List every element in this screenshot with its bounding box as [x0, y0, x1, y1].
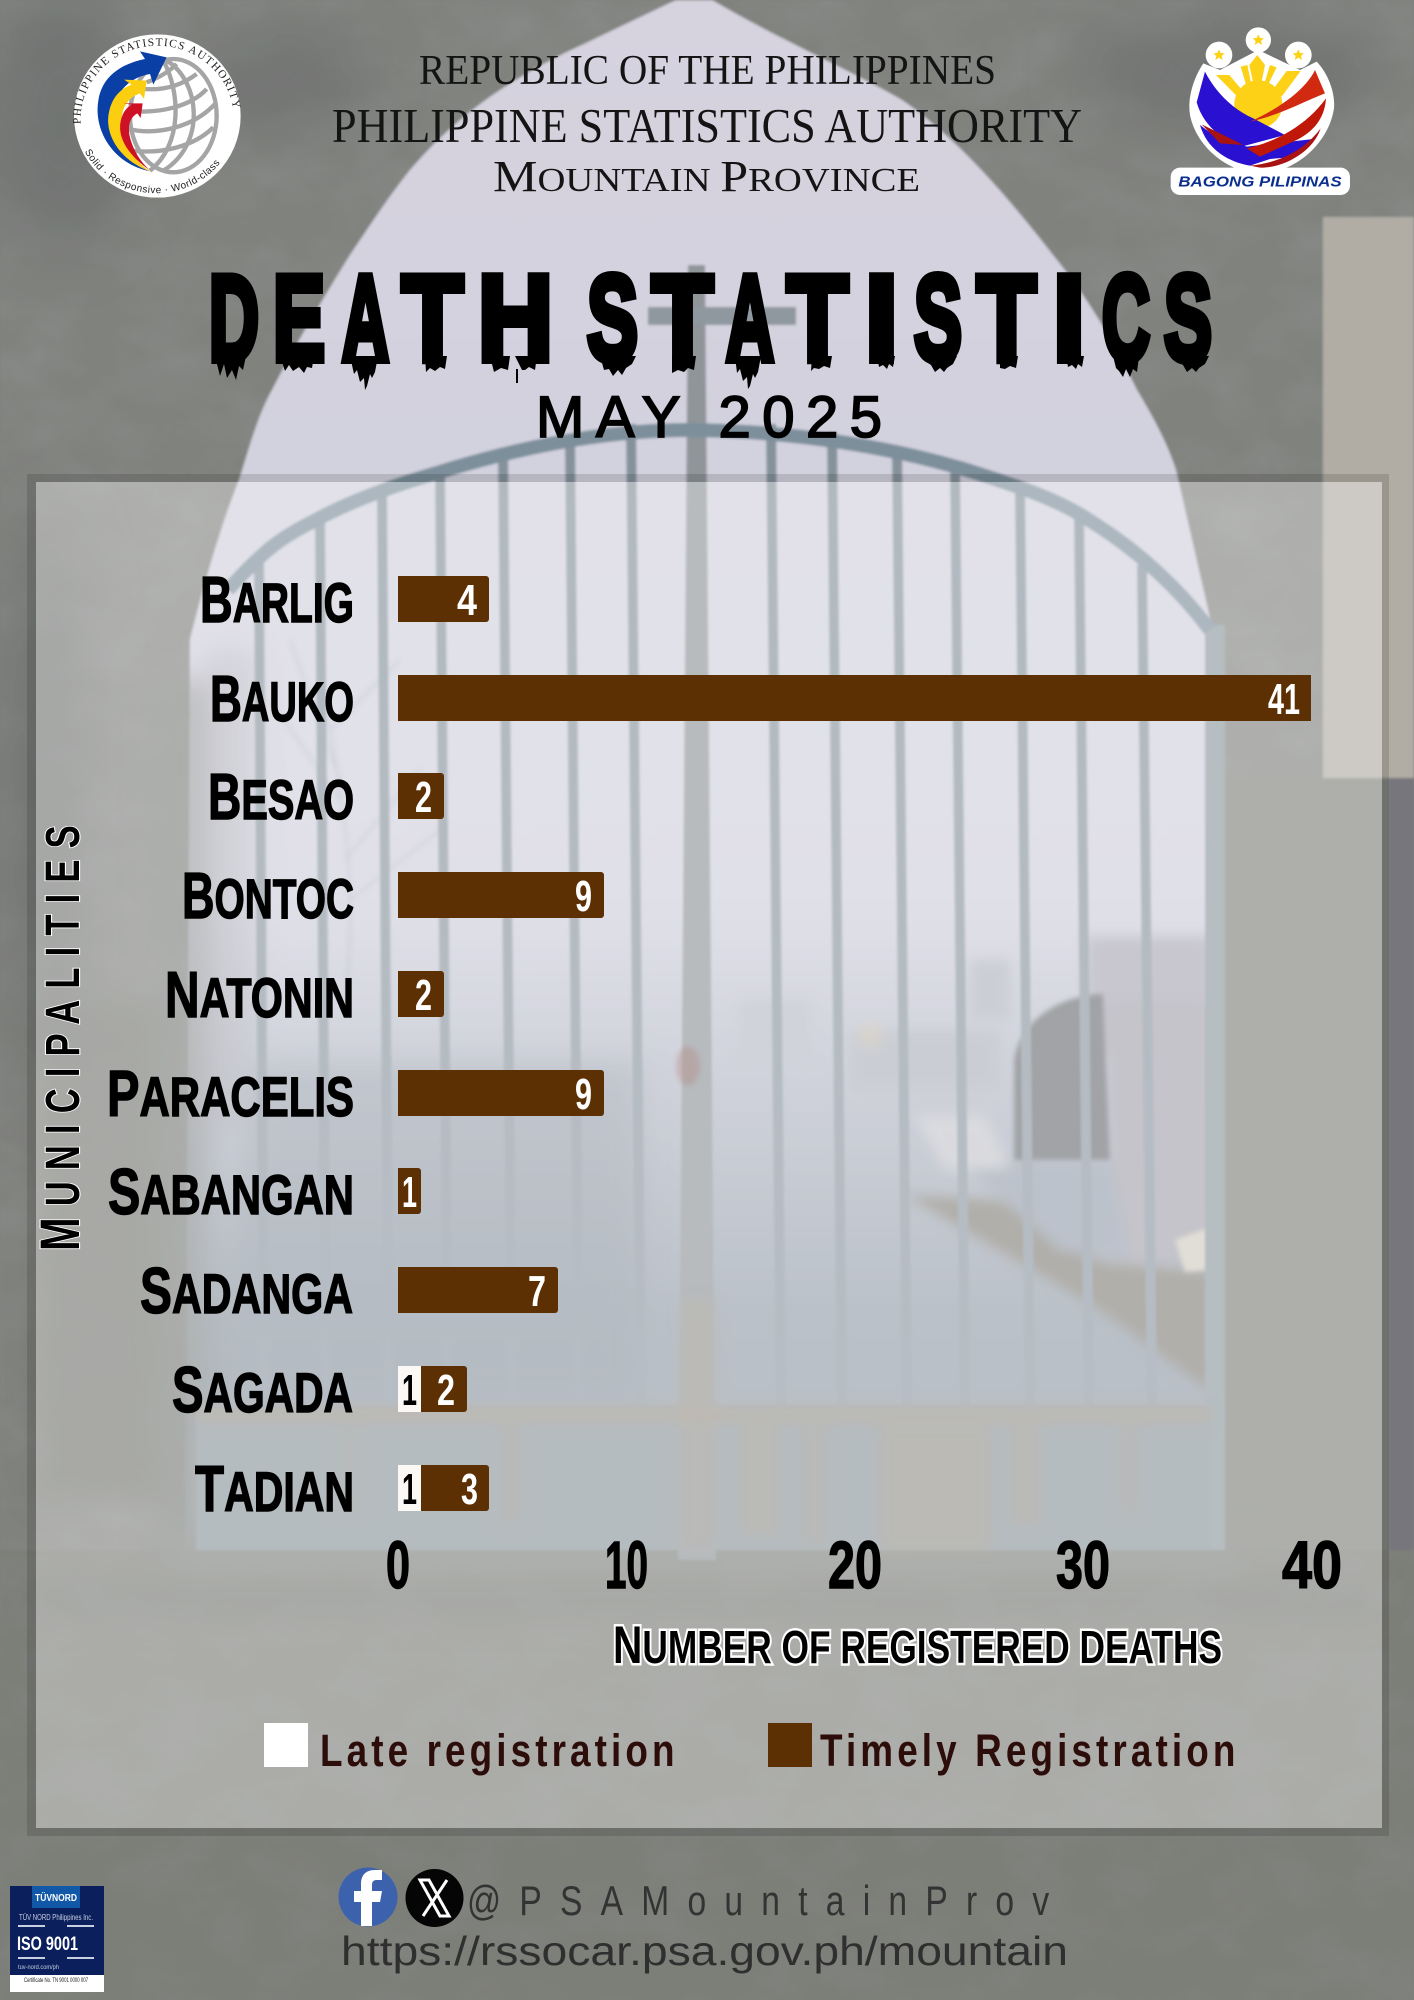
- icon: ISO 9001 certification badge: Certificate No. TN 9001 0000 007: [24, 1978, 88, 1984]
- logo: Bagong Pilipinas: BAGONG PILIPINAS: [1178, 175, 1342, 191]
- row: Sadanga: 7: [528, 1267, 546, 1316]
- x axis tick labels: 40: [1282, 1528, 1342, 1603]
- row: Bontoc: 9: [575, 872, 592, 921]
- row: Barlig: 4: [457, 576, 477, 625]
- title: death statistics: T: [787, 250, 848, 386]
- title: death statistics: A: [342, 250, 389, 386]
- icon: ISO 9001 certification badge: tuv-nord.com/ph: [18, 1965, 59, 1971]
- x axis tick labels: 10: [605, 1528, 648, 1603]
- title: death statistics: S: [914, 250, 962, 386]
- title: death statistics: T: [977, 250, 1036, 386]
- row: Paracelis: 9: [575, 1070, 592, 1119]
- cemetery distance: [740, 937, 1212, 1392]
- row: Bontoc: [182, 859, 604, 932]
- row: Besao: 2: [415, 773, 432, 822]
- title: death statistics: C: [1102, 250, 1150, 386]
- icon: X: [406, 1869, 464, 1927]
- x axis tick labels: [386, 1528, 1342, 1603]
- header: government lines: REPUBLIC OF THE PHILIPPINES: [419, 48, 996, 94]
- title: death statistics: I: [865, 250, 898, 386]
- axis title: municipalities: MUNICIPALITIES: [30, 814, 92, 1251]
- row: Bontoc: BONTOC: [182, 859, 354, 932]
- bare tree: [270, 640, 440, 1000]
- title: death statistics: H: [478, 250, 553, 386]
- header: government lines: [332, 48, 1082, 201]
- row: Sadanga: SADANGA: [140, 1254, 353, 1327]
- icon: ISO 9001 certification badge: [10, 1886, 104, 1992]
- memorial plaque: [1175, 1228, 1207, 1272]
- legend: late registration: Late registration: [320, 1726, 679, 1776]
- title: death statistics: D: [209, 250, 259, 386]
- title: death statistics: I: [1053, 250, 1085, 386]
- icon: ISO 9001 certification badge: ISO 9001: [17, 1934, 78, 1955]
- row: Paracelis: [107, 1057, 604, 1130]
- row: Bauko: 41: [1268, 675, 1300, 724]
- row: Tadian: TADIAN: [195, 1452, 354, 1525]
- row: Barlig: BARLIG: [200, 563, 354, 636]
- row: Bauko: [210, 662, 1311, 735]
- bar chart: registered deaths by municipality: [107, 563, 1311, 1525]
- title: death statistics: S: [587, 250, 638, 386]
- icon: ISO 9001 certification badge: TÜVNORD: [35, 1891, 77, 1904]
- tombstone: [1014, 994, 1110, 1160]
- row: Sagada: SAGADA: [172, 1353, 353, 1426]
- title: death statistics: A: [726, 250, 774, 386]
- logo: Philippine Statistics Authority seal: PHILIPPINE STATISTICS AUTHORITY: [73, 38, 240, 124]
- row: Besao: BESAO: [208, 760, 354, 833]
- icon: ISO 9001 certification badge: TÜV NORD Philippines Inc.: [19, 1913, 93, 1922]
- header: government lines: PHILIPPINE STATISTICS AUTHORITY: [332, 98, 1082, 153]
- logo: Philippine Statistics Authority seal: Solid · Responsive · World-class: [86, 149, 220, 194]
- icon: facebook: [338, 1868, 398, 1926]
- x axis tick labels: 30: [1056, 1528, 1110, 1603]
- title: death statistics: E: [273, 250, 325, 386]
- row: Bauko: BAUKO: [210, 662, 354, 735]
- dripping paint: [216, 356, 1209, 390]
- row: Natonin: 2: [415, 971, 432, 1020]
- row: Paracelis: PARACELIS: [107, 1057, 354, 1130]
- row: Sabangan: 1: [402, 1168, 417, 1217]
- row: Sabangan: SABANGAN: [108, 1155, 354, 1228]
- row: Sagada: 1: [402, 1366, 417, 1415]
- x axis title: NUMBER OF REGISTERED DEATHS: [613, 1616, 1222, 1675]
- title: death statistics: S: [1164, 250, 1212, 386]
- row: Tadian: 1: [402, 1465, 417, 1514]
- title: death statistics: T: [652, 250, 713, 386]
- logo: Philippine Statistics Authority seal: [73, 34, 241, 198]
- subtitle: month and year: MAY 2025: [536, 385, 882, 450]
- logo: Bagong Pilipinas: [1171, 27, 1350, 195]
- row: Tadian: 3: [461, 1465, 478, 1514]
- row: Natonin: NATONIN: [165, 958, 354, 1031]
- x axis tick labels: 0: [386, 1528, 410, 1603]
- x axis tick labels: 20: [828, 1528, 882, 1603]
- title: death statistics: T: [402, 250, 463, 386]
- row: Sagada: 2: [437, 1366, 455, 1415]
- social handle: @PSAMountainProv: [467, 1879, 1067, 1925]
- legend: timely registration: Timely Registration: [820, 1726, 1239, 1776]
- header: government lines: MOUNTAIN PROVINCE: [493, 152, 920, 201]
- panel: chart backing: [27, 474, 1389, 1836]
- title: death statistics: [209, 250, 1212, 390]
- website url: https://rssocar.psa.gov.ph/mountain: [341, 1928, 1068, 1974]
- legend: [264, 1723, 1239, 1776]
- gate bars: [254, 265, 1225, 1560]
- row: Sadanga: [140, 1254, 558, 1327]
